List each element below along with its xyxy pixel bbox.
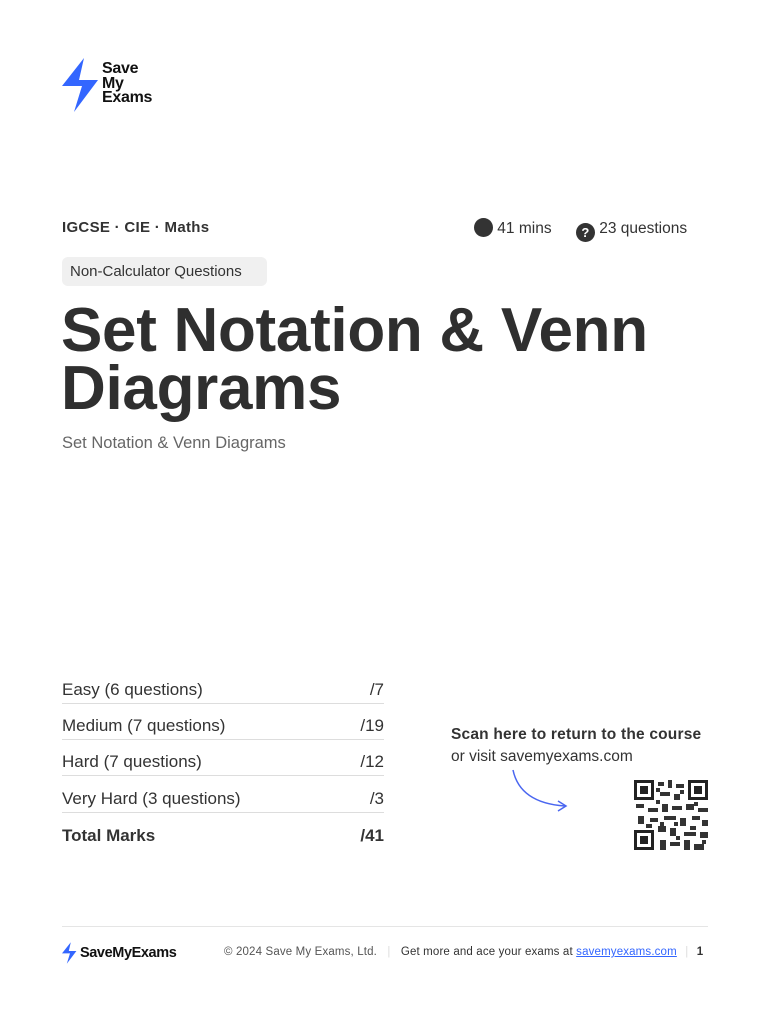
marks table xyxy=(62,680,384,845)
footer divider xyxy=(62,926,708,927)
scan text: Scan here to return to the course xyxy=(451,726,701,743)
tag: Non-Calculator Questions xyxy=(70,263,242,280)
logo: Exams xyxy=(102,89,152,106)
marks table: Very Hard (3 questions) xyxy=(62,789,241,808)
marks table: /3 xyxy=(370,789,384,808)
marks table: /19 xyxy=(360,716,384,735)
logo: Save xyxy=(102,60,138,77)
title: Diagrams xyxy=(61,354,341,423)
meta: time and questions xyxy=(474,218,687,242)
scan text: or visit savemyexams.com xyxy=(451,748,633,765)
breadcrumb: IGCSE · CIE · Maths xyxy=(62,219,209,236)
marks table: /12 xyxy=(360,752,384,771)
meta: time and questions: ? xyxy=(581,225,589,240)
marks table: Medium (7 questions) xyxy=(62,716,225,735)
footer logo xyxy=(62,942,176,964)
marks table: Easy (6 questions) xyxy=(62,680,203,699)
footer logo: SaveMyExams xyxy=(80,945,176,961)
logo: My xyxy=(102,74,124,92)
marks table: /41 xyxy=(360,826,384,845)
tag xyxy=(62,257,267,286)
marks table: Total Marks xyxy=(62,826,155,845)
title xyxy=(61,296,648,423)
scan text xyxy=(451,726,701,765)
QR code xyxy=(634,780,708,850)
arrow xyxy=(512,770,568,812)
subtitle: Set Notation & Venn Diagrams xyxy=(62,434,286,452)
marks table: /7 xyxy=(370,680,384,699)
meta: time and questions: 41 mins 23 questions xyxy=(497,220,687,237)
footer text: © 2024 Save My Exams, Ltd. | Get more and ace your exams at savemyexams.com | 1 xyxy=(224,946,703,958)
logo xyxy=(62,58,152,112)
marks table: Hard (7 questions) xyxy=(62,752,202,771)
title: Set Notation & Venn xyxy=(61,296,648,365)
